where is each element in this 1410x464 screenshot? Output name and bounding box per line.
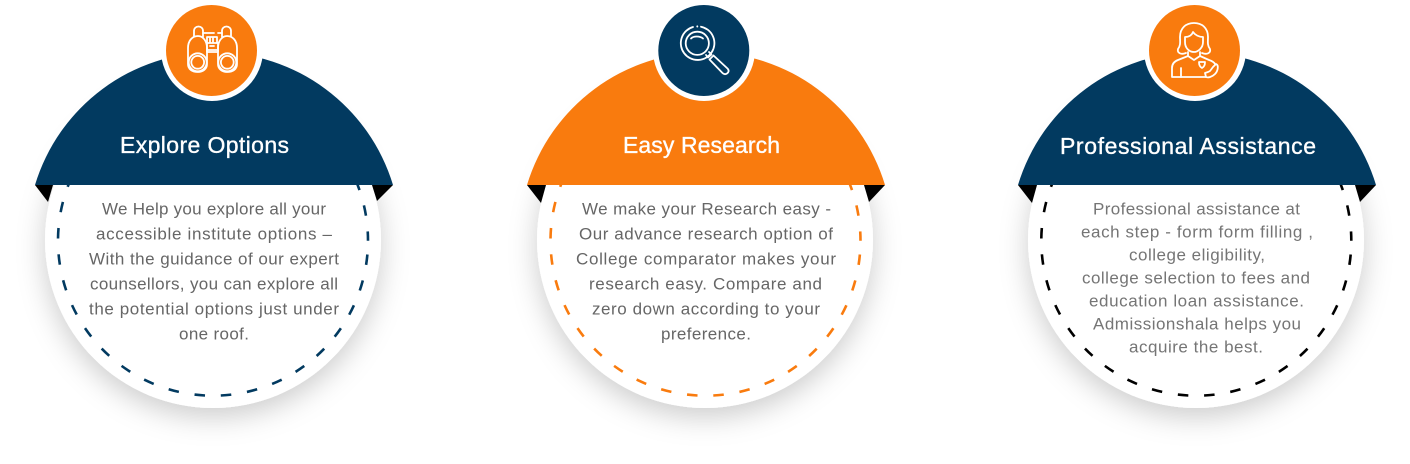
description text: research easy. Compare and <box>589 274 822 294</box>
description text: the potential options just under <box>89 300 339 318</box>
panel: easy research <box>527 0 885 408</box>
description text: counsellors, you can explore all <box>90 274 338 294</box>
description text: We Help you explore all your <box>102 200 326 218</box>
description text: college eligibility, <box>1129 246 1265 264</box>
ribbon fold left <box>527 185 546 203</box>
description text: With the guidance of our expert <box>89 250 339 268</box>
panel: explore options <box>35 0 393 408</box>
heading: Professional Assistance <box>1060 133 1316 159</box>
dashed ring <box>1041 86 1351 396</box>
dome header <box>1018 52 1376 185</box>
description text: acquire the best. <box>1129 338 1263 356</box>
description text <box>89 200 339 344</box>
description text: Our advance research option of <box>579 224 833 244</box>
description text: zero down according to your <box>592 300 820 318</box>
heading: Explore Options <box>120 132 289 158</box>
icon ring <box>653 0 755 101</box>
icon ring <box>1144 0 1246 101</box>
icon disc <box>658 5 749 96</box>
icon disc <box>1149 5 1240 96</box>
description text: Admissionshala helps you <box>1093 314 1301 334</box>
description text <box>1081 200 1313 356</box>
dome header <box>527 52 885 185</box>
description text: education loan assistance. <box>1089 292 1304 310</box>
icon ring <box>161 0 263 101</box>
panel: professional assistance <box>1018 0 1376 408</box>
dashed ring <box>550 86 860 396</box>
ribbon fold right <box>1355 185 1376 202</box>
description text: Professional assistance at <box>1093 200 1300 218</box>
ribbon fold right <box>372 185 393 201</box>
description text: accessible institute options – <box>96 224 333 244</box>
icon disc <box>166 5 257 96</box>
dashed ring <box>58 86 368 396</box>
icon: magnifying glass <box>681 26 729 74</box>
ribbon fold left <box>35 185 53 202</box>
ribbon fold left <box>1018 185 1037 203</box>
dome header <box>35 52 393 185</box>
description text: college selection to fees and <box>1082 268 1310 288</box>
icon: binoculars <box>188 26 237 72</box>
body circle <box>45 72 381 408</box>
heading: Easy Research <box>623 132 780 158</box>
body circle <box>1028 72 1364 408</box>
description text <box>576 200 836 344</box>
ribbon fold right <box>864 185 885 202</box>
description text: We make your Research easy - <box>582 200 831 218</box>
description text: preference. <box>661 324 751 344</box>
body circle <box>537 72 873 408</box>
description text: one roof. <box>179 324 249 344</box>
icon: support agent woman <box>1172 23 1218 77</box>
description text: each step - form form filling , <box>1081 222 1313 242</box>
description text: College comparator makes your <box>576 250 836 268</box>
